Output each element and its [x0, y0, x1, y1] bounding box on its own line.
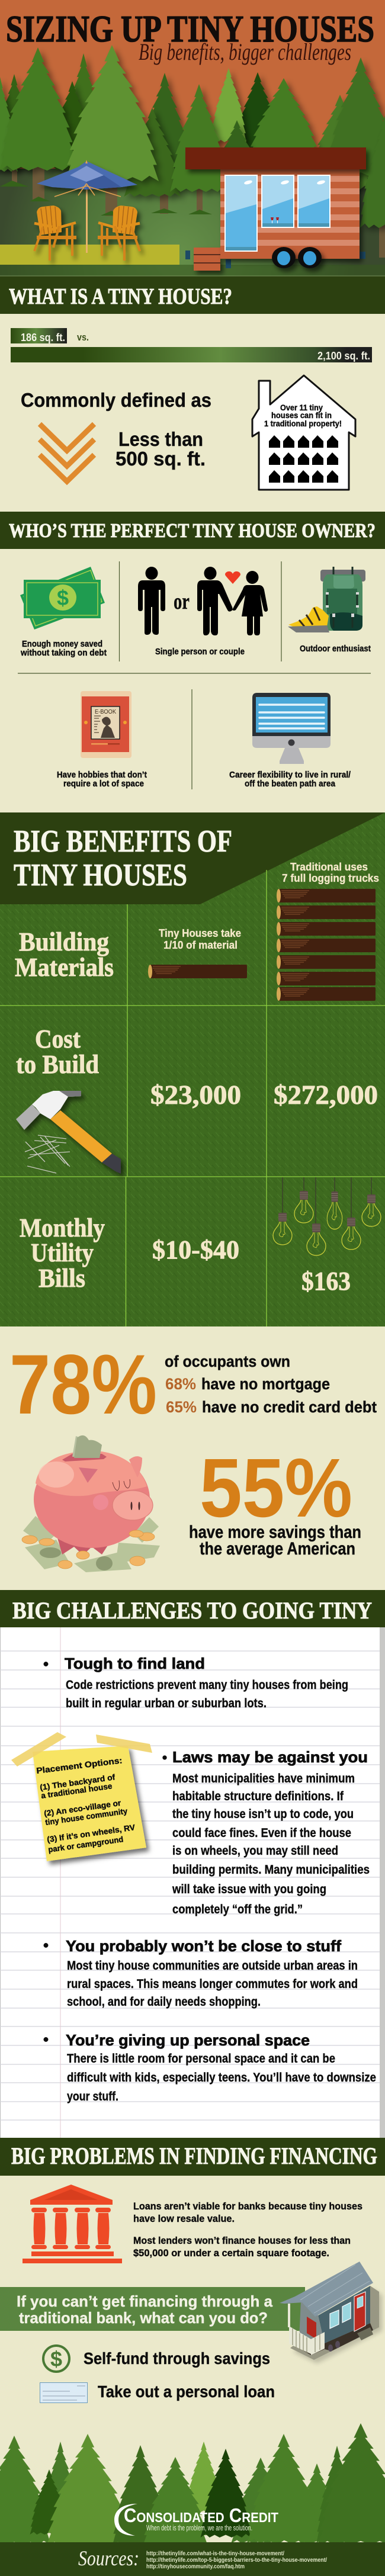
- no credit card debt: 65%: [166, 1398, 197, 1416]
- tiny house: [185, 147, 366, 271]
- sticky note: placement options: [11, 1732, 152, 1861]
- challenge: laws may be against you: is on wheels, you may still need: [172, 1844, 338, 1858]
- option: self-fund: Self-fund through savings: [84, 2349, 270, 2368]
- tiny house material: [148, 927, 247, 978]
- icon: hammer and nails: [16, 1091, 121, 1174]
- yellow deck: [0, 245, 179, 265]
- row label: cost to build: to Build: [16, 1050, 99, 1079]
- row label: monthly utility bills: Utility: [31, 1238, 94, 1267]
- panel: notebook paper: [0, 1627, 385, 2138]
- challenge: not close to stuff: You probably won’t be close to stuff: [66, 1937, 341, 1955]
- caption: career flexibility: off the beaten path area: [245, 779, 336, 789]
- stat: 78 percent own: [9, 1338, 377, 1432]
- financing problems text: Loans aren’t viable for banks because tiny houses: [133, 2201, 362, 2212]
- hero illustration: [0, 0, 385, 277]
- challenge: giving up personal space: You’re giving up personal space: [66, 2031, 310, 2049]
- heading block: TINY HOUSES: [14, 858, 187, 892]
- section header: big challenges: [0, 1590, 385, 1627]
- chair: right: [98, 205, 140, 261]
- umbrella: [37, 160, 137, 253]
- tiny house material: Tiny Houses take: [159, 927, 241, 939]
- no mortgage: have no mortgage: [201, 1375, 330, 1393]
- ground: [0, 169, 385, 277]
- sticky note: placement options: Placement Options:: [36, 1755, 123, 1775]
- hitch box: [194, 248, 220, 271]
- challenge: tough to find land: Code restrictions prevent many tiny houses from being: [66, 1678, 348, 1692]
- less than 500 sq ft: 500 sq. ft.: [116, 448, 206, 470]
- capacity text: [264, 403, 342, 428]
- heading block: BIG BENEFITS OF: [14, 824, 232, 859]
- tiny house cost: $23,000: [150, 1080, 241, 1110]
- roof: [185, 147, 366, 169]
- icon: couple: [197, 567, 268, 635]
- stat: 55 percent savings: 55%: [200, 1441, 352, 1534]
- icon: e-book tablet: E-BOOK: [95, 709, 116, 715]
- icon: computer monitor: [252, 693, 331, 764]
- icon: down chevrons: [40, 424, 94, 481]
- traditional house material: [277, 861, 379, 1001]
- caption: outdoor enthusiast: Outdoor enthusiast: [300, 644, 371, 654]
- house outline: [252, 375, 355, 490]
- traditional house cost: $272,000: [274, 1080, 378, 1110]
- icon: e-book tablet: [81, 691, 131, 758]
- less than 500 sq ft: Less than: [118, 428, 203, 450]
- small bar: 186 sq. ft.: [21, 332, 65, 343]
- section header: what is a tiny house: [0, 276, 385, 314]
- sticky note: placement options: (1) The backyard of: [39, 1772, 116, 1792]
- stat: 78 percent own: 78%: [9, 1338, 157, 1432]
- section header: what is a tiny house: WHAT IS A TINY HOUSE?: [9, 284, 232, 309]
- green textured background: [0, 812, 385, 1326]
- icon: single person: [138, 567, 165, 635]
- source urls: http://thetinylife.com/top-5-biggest-barriers-to-the-tiny-house-movement/: [146, 2556, 327, 2564]
- icon: bank: [23, 2185, 122, 2263]
- savings caption: [189, 1523, 361, 1559]
- caption: hobbies: require a lot of space: [63, 779, 144, 789]
- challenge: laws may be against you: will take issue with you going: [172, 1883, 326, 1896]
- row label: monthly utility bills: [20, 1213, 105, 1293]
- back forest: [0, 45, 385, 258]
- green banner: If you can’t get financing through a: [17, 2292, 273, 2310]
- challenge: tough to find land: [44, 1655, 348, 1710]
- paper: [0, 1627, 385, 2138]
- traditional house bills: $163: [301, 1267, 351, 1296]
- occupants own: of occupants own: [165, 1353, 290, 1370]
- caption: money saved: Enough money saved: [22, 639, 102, 649]
- challenge: laws may be against you: Most municipalities have minimum: [172, 1772, 355, 1785]
- challenge: laws may be against you: [162, 1748, 370, 1916]
- caption: money saved: without taking on debt: [20, 648, 107, 658]
- source urls: http://thetinylife.com/what-is-the-tiny-house-movement/: [146, 2550, 284, 2557]
- financing problems text: $50,000 or under a certain square footage.: [133, 2247, 329, 2259]
- caption: hobbies: Have hobbies that don’t: [57, 770, 147, 780]
- small bar: [11, 328, 67, 343]
- challenge: giving up personal space: There is little room for personal space and it can be: [67, 2052, 335, 2066]
- window: left: [225, 175, 257, 251]
- sticky note: placement options: (3) If it’s on wheels, RV: [46, 1823, 136, 1844]
- row label: monthly utility bills: Monthly: [20, 1213, 105, 1242]
- logo: Consolidated Credit: [114, 2504, 278, 2536]
- sticky note: placement options: (2) An eco-village or: [43, 1798, 122, 1818]
- tiny house bills: $10-$40: [152, 1235, 239, 1264]
- definition heading: Commonly defined as: [21, 389, 211, 411]
- traditional house material: 7 full logging trucks: [282, 872, 379, 884]
- heading block: [0, 812, 385, 904]
- row label: cost to build: Cost: [35, 1024, 81, 1053]
- challenge: giving up personal space: [44, 2031, 376, 2103]
- option: personal loan: [40, 2382, 275, 2403]
- challenge: laws may be against you: the tiny house isn’t up to code, you: [172, 1807, 354, 1821]
- footer: sources: [0, 2542, 385, 2576]
- vs label: vs.: [77, 332, 89, 343]
- source urls: [146, 2550, 327, 2570]
- challenge: laws may be against you: habitable structure definitions. If: [172, 1790, 344, 1803]
- capacity text: houses can fit in: [271, 410, 332, 420]
- row label: building materials: Materials: [15, 953, 114, 982]
- panel: big benefits: [0, 812, 385, 1326]
- mini houses grid: [269, 435, 338, 483]
- challenge: laws may be against you: Laws may be against you: [172, 1748, 368, 1766]
- sticky note: placement options: a traditional house: [40, 1781, 113, 1800]
- challenge: tough to find land: Tough to find land: [65, 1655, 205, 1672]
- logo: Consolidated Credit: Consolidated Credit: [124, 2504, 278, 2526]
- house body: [220, 169, 360, 259]
- tiny house material: 1/10 of material: [163, 939, 238, 951]
- challenge: tough to find land: built in regular urban or suburban lots.: [66, 1697, 267, 1710]
- option: self-fund: [43, 2346, 270, 2372]
- caption: single or couple: Single person or couple: [155, 647, 245, 657]
- icon: isometric tiny house: [280, 2262, 379, 2360]
- challenge: giving up personal space: your stuff.: [67, 2090, 118, 2103]
- wheels: [272, 247, 322, 268]
- icon: piggy bank: [22, 1435, 160, 1572]
- icon: money: [20, 567, 105, 629]
- row label: building materials: Building: [19, 927, 109, 956]
- caption: hobbies: [57, 770, 147, 789]
- financing problems text: have low resale value.: [133, 2213, 235, 2224]
- option: self-fund: $: [50, 2347, 62, 2371]
- icon: money: $: [57, 586, 69, 610]
- window: right: [298, 175, 330, 227]
- size comparison bars: [11, 328, 372, 362]
- chair: left: [34, 205, 76, 261]
- house capacity graphic: [252, 375, 355, 490]
- footer forest: [0, 2423, 385, 2546]
- caption: career flexibility: [229, 770, 351, 789]
- challenge: laws may be against you: completely “off the grid.”: [172, 1903, 303, 1916]
- traditional house material: Traditional uses: [290, 861, 368, 873]
- section header: financing: [0, 2138, 385, 2176]
- savings caption: the average American: [200, 1539, 355, 1559]
- logo: Consolidated Credit: When debt is the problem, we are the solution.: [146, 2524, 252, 2532]
- green banner: traditional bank, what can you do?: [19, 2309, 268, 2327]
- source urls: http://tinyhousecommunity.com/faq.htm: [146, 2563, 245, 2570]
- row label: monthly utility bills: Bills: [38, 1264, 85, 1293]
- no credit card debt: have no credit card debt: [202, 1398, 377, 1416]
- icon: backpack and boot: [288, 567, 365, 632]
- challenge: not close to stuff: school, and for daily needs shopping.: [67, 1995, 261, 2009]
- sticky note: placement options: tiny house community: [44, 1807, 129, 1827]
- owner traits grid: [18, 561, 371, 789]
- sky: [0, 0, 385, 189]
- window: middle: [262, 175, 294, 227]
- financing problems text: Most lenders won’t finance houses for less than: [133, 2235, 351, 2246]
- large bar: [11, 347, 372, 362]
- challenge: not close to stuff: [44, 1937, 358, 2009]
- or: or: [174, 589, 190, 614]
- capacity text: 1 traditional property!: [264, 419, 342, 428]
- sticky note: placement options: park or campground: [47, 1835, 124, 1854]
- less than 500 sq ft: [116, 428, 206, 470]
- large bar: 2,100 sq. ft.: [317, 350, 370, 362]
- row label: building materials: [15, 927, 114, 982]
- capacity text: Over 11 tiny: [280, 403, 323, 412]
- icon: hanging bulbs: [273, 1177, 381, 1255]
- section header: perfect owner: [0, 512, 385, 549]
- green banner: [0, 2287, 305, 2331]
- row label: cost to build: [16, 1024, 99, 1079]
- caption: money saved: [20, 639, 107, 658]
- no mortgage: 68%: [165, 1375, 196, 1393]
- caption: career flexibility: Career flexibility to live in rural/: [229, 770, 351, 780]
- sources label: Sources:: [78, 2546, 139, 2570]
- option: personal loan: Take out a personal loan: [98, 2382, 275, 2401]
- financing problems text: [133, 2201, 362, 2259]
- challenge: laws may be against you: could face fines. Even if the house: [172, 1826, 351, 1840]
